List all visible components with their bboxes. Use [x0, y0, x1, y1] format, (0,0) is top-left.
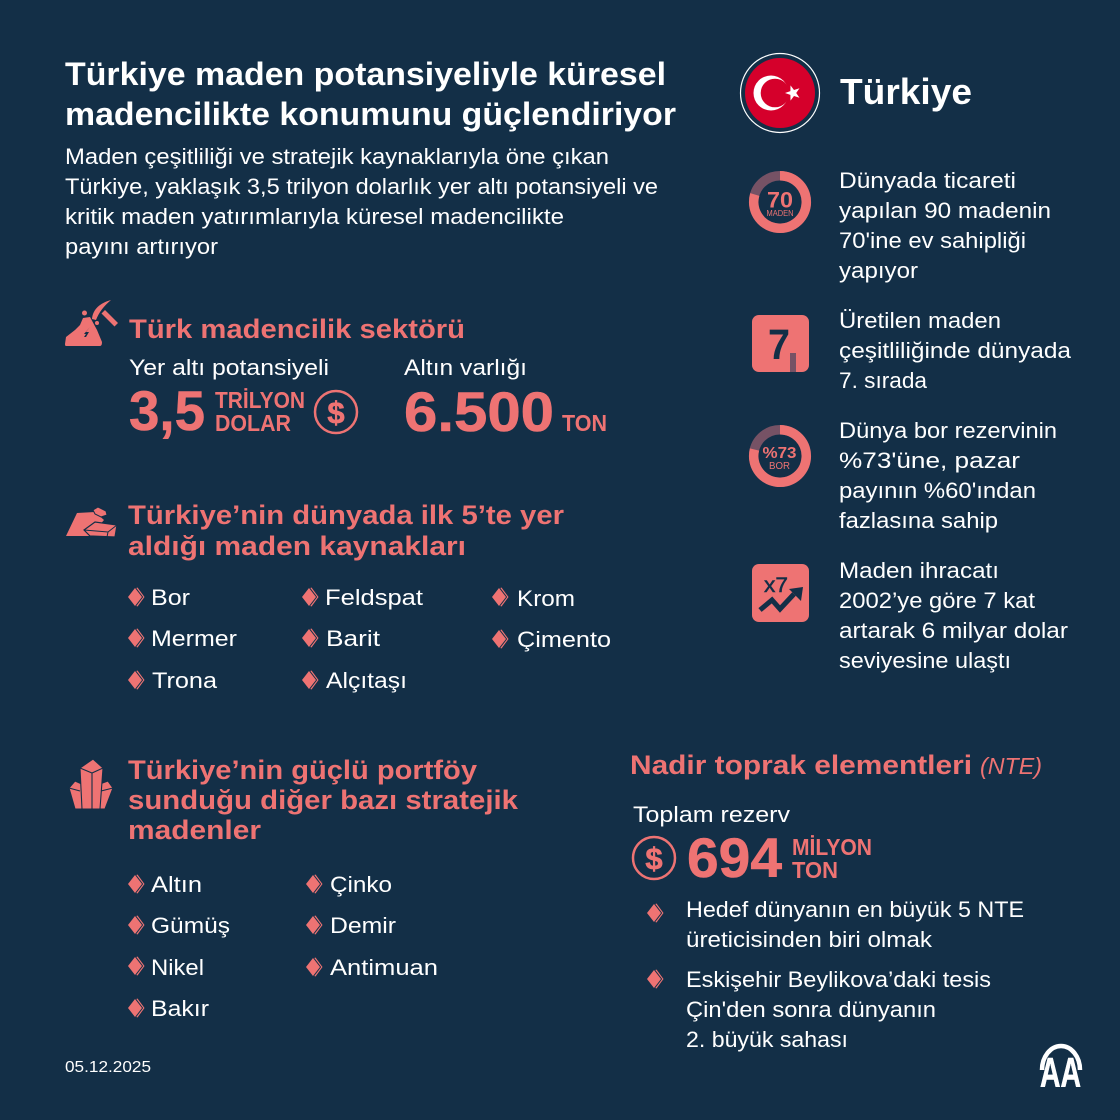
icon: x7 growth: x7	[764, 574, 788, 597]
panel: ilk 5 maden kaynakları	[66, 500, 611, 693]
list: minerals: Çinko	[330, 872, 392, 897]
panel: stratejik madenler: sunduğu diğer bazı stratejik	[128, 785, 519, 815]
fact: 70: Dünyada ticareti	[839, 168, 1016, 193]
list: minerals: Feldspat	[325, 585, 423, 610]
stat: toplam rezerv: MİLYON	[792, 834, 872, 860]
stat: yer altı potansiyeli: 3,5	[129, 379, 205, 442]
fact: bor: %73'üne, pazar	[839, 448, 1020, 473]
icon: 70 maden donut: 70	[767, 188, 793, 213]
stat: yer altı potansiyeli: $	[327, 395, 345, 430]
fact: bor	[839, 418, 1057, 533]
fact: 70: 70'ine ev sahipliği	[839, 228, 1026, 253]
list: minerals: Mermer	[151, 626, 237, 651]
stat: altın varlığı: TON	[562, 410, 607, 436]
intro text: payını artırıyor	[65, 234, 218, 259]
list: minerals: Çimento	[517, 627, 611, 652]
bullet: Beylikova: Çin'den sonra dünyanın	[686, 997, 936, 1022]
fact: bor: Dünya bor rezervinin	[839, 418, 1057, 443]
list: minerals: Krom	[517, 586, 575, 611]
fact: 7: çeşitliliğinde dünyada	[839, 338, 1072, 363]
bullet: Beylikova: Eskişehir Beylikova’daki tesis	[686, 967, 991, 992]
icon: %73 bor donut: BOR	[769, 460, 790, 472]
bullet: hedef	[647, 897, 1024, 952]
country name: Türkiye	[840, 71, 972, 112]
list: minerals	[128, 585, 611, 693]
bullet: hedef: Hedef dünyanın en büyük 5 NTE	[686, 897, 1024, 922]
bullet: Beylikova	[647, 967, 991, 1052]
panel: stratejik madenler	[69, 755, 519, 1021]
fact: ihracat: 2002’ye göre 7 kat	[839, 588, 1035, 613]
list: minerals: Barit	[326, 626, 380, 651]
list: minerals: Trona	[152, 668, 218, 693]
stat: toplam rezerv: $	[645, 841, 663, 876]
fact: ihracat: seviyesine ulaştı	[839, 648, 1011, 673]
stat: yer altı potansiyeli: TRİLYON	[215, 387, 305, 413]
stat: toplam rezerv: 694	[687, 826, 782, 889]
icon: ore pile	[66, 507, 117, 537]
icon: x7 growth	[752, 564, 809, 622]
fact: bor: payının %60'ından	[839, 478, 1036, 503]
icon: %73 bor donut	[754, 430, 806, 482]
list: minerals: Gümüş	[151, 913, 230, 938]
intro text	[65, 144, 658, 259]
stat: yer altı potansiyeli	[129, 355, 357, 442]
heading: Türkiye’nin dünyada ilk 5’te yer	[128, 500, 565, 530]
icon: 70 maden donut	[754, 176, 806, 228]
bullet: hedef: üreticisinden biri olmak	[686, 927, 933, 952]
heading: Türkiye’nin güçlü portföy	[128, 755, 477, 785]
list: minerals: Demir	[330, 913, 396, 938]
intro text: Türkiye, yaklaşık 3,5 trilyon dolarlık yer altı potansiyeli ve	[65, 174, 658, 199]
panel: Türkiye facts	[740, 54, 1072, 673]
fact: 70: yapılan 90 madenin	[839, 198, 1051, 223]
title: madencilikte konumunu güçlendiriyor	[65, 96, 676, 132]
list: minerals	[128, 872, 438, 1021]
list: minerals: Nikel	[151, 955, 204, 980]
heading: (NTE)	[980, 753, 1042, 779]
intro text: kritik maden yatırımlarıyla küresel madencilikte	[65, 204, 564, 229]
panel: nadir toprak elementleri	[630, 750, 1042, 1052]
stat: yer altı potansiyeli: DOLAR	[215, 410, 291, 436]
icon: AA logo: AA	[1040, 1049, 1081, 1096]
date: 05.12.2025	[65, 1059, 151, 1076]
fact: ihracat: artarak 6 milyar dolar	[839, 618, 1068, 643]
fact: 7: 7. sırada	[839, 368, 928, 393]
fact: bor: fazlasına sahip	[839, 508, 998, 533]
icon: rank 7: 7	[768, 321, 790, 369]
stat: toplam rezerv: TON	[792, 857, 838, 883]
bullet: Beylikova: 2. büyük sahası	[686, 1027, 848, 1052]
title	[65, 56, 676, 132]
fact: 70: yapıyor	[839, 258, 918, 283]
stat: toplam rezerv	[633, 802, 872, 889]
intro text: Maden çeşitliliği ve stratejik kaynaklarıyla öne çıkan	[65, 144, 609, 169]
fact: 7: Üretilen maden	[839, 308, 1001, 333]
icon: 70 maden donut: MADEN	[766, 208, 794, 218]
icon: %73 bor donut: %73	[762, 445, 797, 462]
list: minerals: Alçıtaşı	[326, 668, 407, 693]
heading: Türk madencilik sektörü	[129, 314, 465, 344]
stat: altın varlığı: Altın varlığı	[404, 355, 527, 380]
list: minerals: Bakır	[151, 996, 209, 1021]
fact: 70	[839, 168, 1051, 283]
stat: yer altı potansiyeli: Yer altı potansiyeli	[129, 355, 329, 380]
panel: Türk madencilik sektörü	[65, 300, 607, 443]
panel: ilk 5 maden kaynakları: aldığı maden kaynakları	[128, 531, 466, 561]
stat: altın varlığı: 6.500	[404, 380, 554, 443]
list: minerals: Antimuan	[330, 955, 438, 980]
fact: 7	[839, 308, 1072, 393]
icon: crystals	[69, 759, 113, 809]
fact: ihracat	[839, 558, 1068, 673]
icon: Turkish flag	[740, 54, 820, 132]
icon: pickaxe and rock	[65, 300, 118, 346]
title: Türkiye maden potansiyeliyle küresel	[65, 56, 666, 92]
list: minerals: Bor	[151, 585, 190, 610]
icon: AA logo	[1040, 1046, 1081, 1096]
heading: Nadir toprak elementleri	[630, 750, 972, 780]
stat: toplam rezerv: Toplam rezerv	[633, 802, 790, 827]
stat: altın varlığı	[404, 355, 607, 443]
panel: stratejik madenler: madenler	[128, 815, 262, 845]
fact: ihracat: Maden ihracatı	[839, 558, 999, 583]
list: minerals: Altın	[151, 872, 202, 897]
icon: rank 7	[752, 315, 809, 372]
